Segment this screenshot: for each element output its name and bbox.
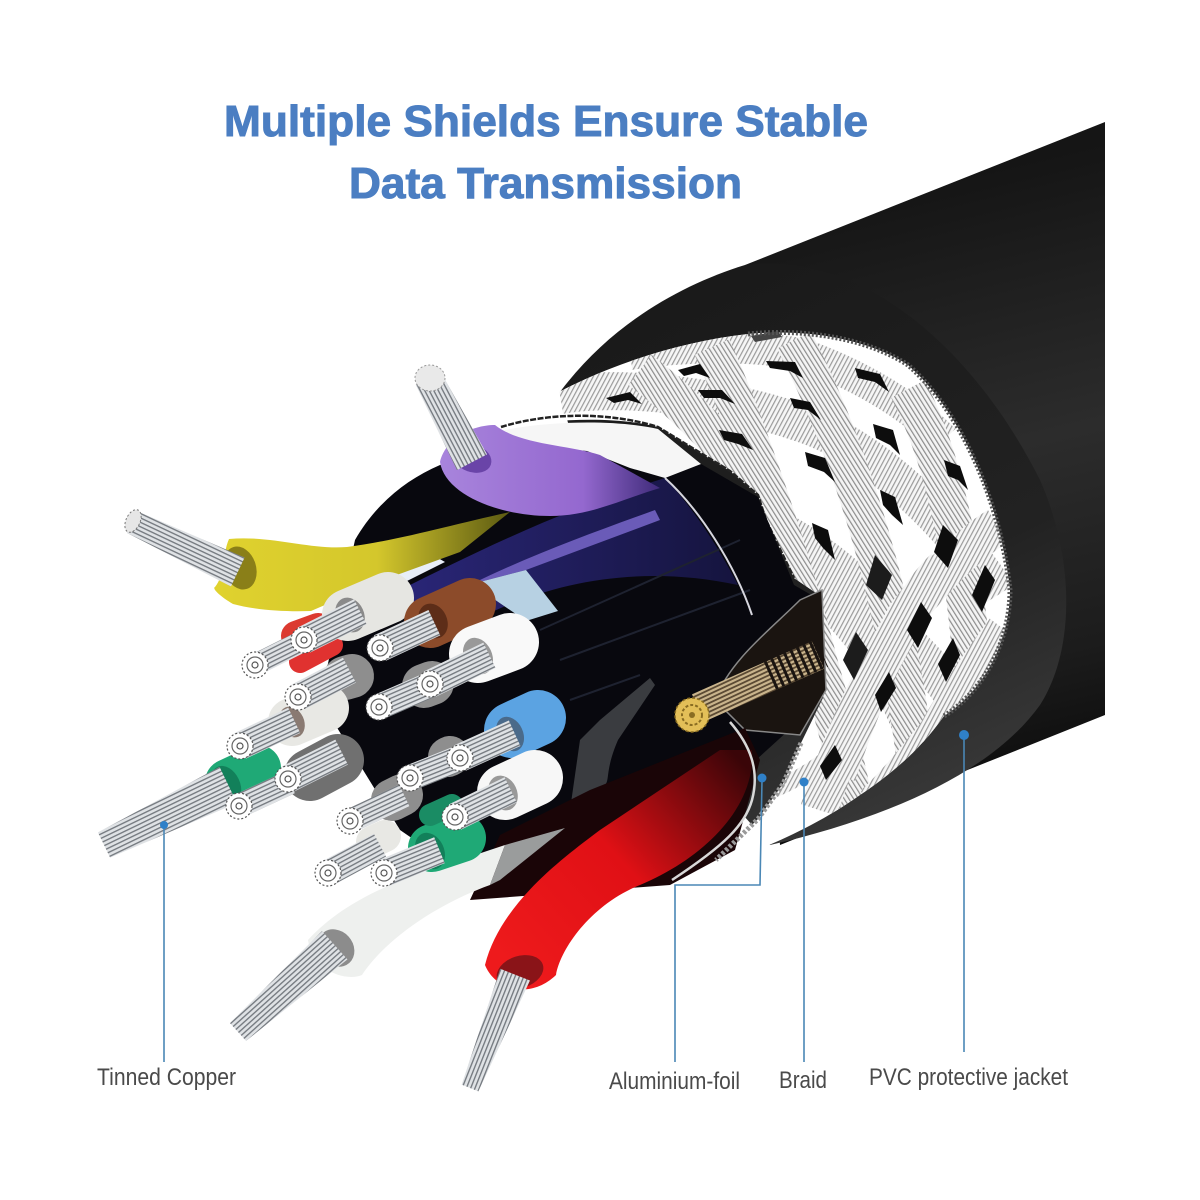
inner core dark mass — [320, 440, 820, 885]
gray ribbon — [570, 678, 655, 810]
title: Data Transmission — [349, 159, 742, 208]
white big wire insulation — [308, 828, 565, 977]
callout: Aluminium-foil — [609, 774, 766, 1095]
dark foil pocket — [715, 590, 826, 735]
jacket end face — [560, 264, 1066, 845]
cylinder edge highlight — [665, 478, 752, 615]
title: Multiple Shields Ensure Stable — [224, 97, 868, 146]
gray insulations — [310, 676, 450, 800]
callout: PVC protective jacket — [869, 730, 1068, 1091]
red big wire insulation — [485, 750, 752, 995]
light blue foil strip — [472, 570, 558, 621]
purple wire insulation — [440, 425, 660, 516]
white foil above the core — [500, 422, 701, 478]
white top insulation — [330, 593, 388, 637]
callout: Tinned Copper — [97, 821, 236, 1091]
red small wire insulation — [296, 628, 332, 662]
icon: copper drain wire — [675, 653, 822, 732]
callout: Braid: Braid — [779, 1067, 827, 1094]
foil serrated edge — [716, 743, 801, 860]
white mid-left insulation — [274, 702, 325, 742]
callout: Aluminium-foil: Aluminium-foil — [609, 1068, 740, 1095]
brown insulation — [413, 599, 470, 643]
braid gaps — [606, 331, 995, 780]
conductor end caps — [226, 627, 473, 886]
PVC protective jacket tube — [745, 122, 1105, 845]
braid rim — [748, 332, 1010, 716]
white lower insulation — [483, 771, 535, 815]
aluminium foil outline — [672, 722, 755, 880]
large conductors — [95, 365, 530, 1094]
callout: Braid — [779, 778, 827, 1094]
callout: Tinned Copper: Tinned Copper — [97, 1064, 236, 1091]
small conductors — [234, 599, 520, 886]
yellow wire insulation — [214, 512, 510, 611]
white small insulation — [372, 836, 385, 842]
green left insulation — [205, 761, 262, 809]
green bottom insulation — [409, 805, 462, 874]
white right insulation — [457, 633, 510, 679]
cable illustration — [95, 122, 1105, 1094]
white strip — [395, 558, 445, 582]
callout: PVC protective jacket: PVC protective jacket — [869, 1064, 1068, 1091]
purple shield strip — [472, 510, 660, 584]
braid shield — [501, 331, 1010, 870]
blue shielded pairs — [400, 478, 738, 640]
title — [224, 97, 868, 208]
dark red lower area — [470, 728, 760, 900]
blue insulation — [491, 712, 538, 756]
tear edge of braid — [501, 416, 794, 578]
dark streak curves — [540, 540, 750, 700]
